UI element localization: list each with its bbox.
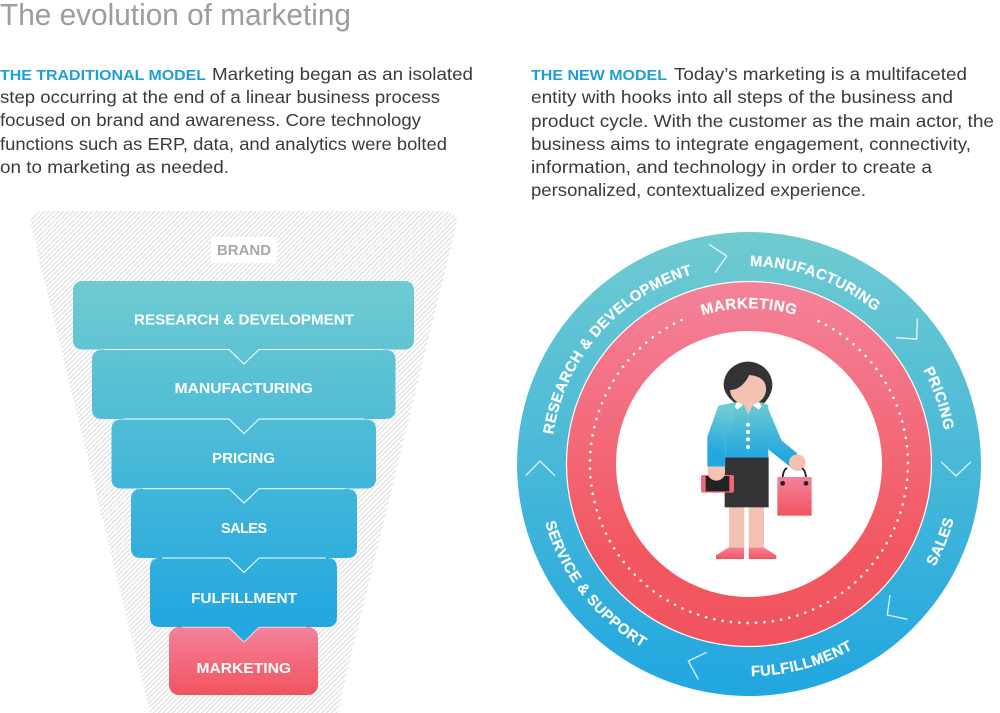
arrow: research to manufacturing xyxy=(709,244,727,273)
arrow: sales to fulfillment xyxy=(887,595,907,619)
text block: the new model: personalized, contextualized experience. xyxy=(531,180,866,200)
text block: the new model xyxy=(531,64,994,200)
bag rivets xyxy=(780,481,808,486)
circular diagram: new model xyxy=(517,232,981,696)
right arm sleeve xyxy=(766,403,797,468)
step: pricing xyxy=(112,420,376,503)
outer ring: business steps xyxy=(517,232,981,696)
text block: the traditional model: Marketing began as an isolated xyxy=(212,64,473,84)
ring label: service and support: SERVICE & SUPPORT xyxy=(546,520,648,646)
ring label: research and development: RESEARCH & DEVELOPMENT xyxy=(543,264,690,434)
text block: the traditional model: on to marketing as needed. xyxy=(0,157,229,177)
skirt xyxy=(725,457,769,507)
heading: the new model: THE NEW MODEL xyxy=(531,68,667,84)
step: research and development: RESEARCH & DEVELOPMENT xyxy=(134,312,354,328)
phone xyxy=(701,475,734,493)
inner ring: marketing xyxy=(566,282,932,646)
ring label: manufacturing: MANUFACTURING xyxy=(750,256,880,310)
neck xyxy=(743,403,753,415)
bag handle xyxy=(783,468,806,483)
left arm sleeve xyxy=(707,402,735,467)
legs xyxy=(729,507,764,548)
text block: the new model: entity with hooks into all steps of the business and xyxy=(531,87,953,107)
center circle xyxy=(616,331,882,597)
hand holding bag xyxy=(789,454,806,471)
step: manufacturing: MANUFACTURING xyxy=(174,381,313,397)
step: marketing xyxy=(169,627,318,695)
funnel diagram: traditional model xyxy=(30,211,457,713)
step: fulfillment xyxy=(150,558,337,642)
heading: the traditional model: THE TRADITIONAL MODEL xyxy=(0,68,206,84)
dotted arc xyxy=(590,319,908,623)
ring label: pricing: PRICING xyxy=(924,366,954,430)
step: sales xyxy=(131,489,357,572)
label: brand xyxy=(211,237,277,263)
arrow: pricing to sales xyxy=(941,462,971,476)
ring label: fulfillment: FULFILLMENT xyxy=(752,640,850,676)
step: fulfillment: FULFILLMENT xyxy=(191,591,297,607)
text block: the new model: information, and technology in order to create a xyxy=(531,157,932,177)
step: pricing: PRICING xyxy=(212,451,275,467)
step: manufacturing xyxy=(92,350,396,434)
face xyxy=(730,375,766,405)
text block: the traditional model: functions such as ERP, data, and analytics were bolted xyxy=(0,134,447,154)
buttons xyxy=(746,423,750,449)
label: brand: BRAND xyxy=(217,243,271,259)
text block: the new model: product cycle. With the customer as the main actor, the xyxy=(531,111,994,131)
text block: the traditional model: step occurring at the end of a linear business process xyxy=(0,87,440,107)
phone screen xyxy=(706,476,729,491)
panel: hatched brand funnel xyxy=(30,211,457,713)
text block: the traditional model: focused on brand and awareness. Core technology xyxy=(0,110,421,130)
hand holding phone xyxy=(708,467,725,481)
shopping bag xyxy=(777,477,812,516)
step: research and development xyxy=(73,281,414,364)
ring label: sales: SALES xyxy=(926,518,953,566)
step: marketing: MARKETING xyxy=(196,661,291,677)
arrow: manufacturing to pricing xyxy=(896,318,917,339)
collar xyxy=(735,401,762,410)
arrow: service to research xyxy=(526,461,555,476)
shirt body xyxy=(725,402,768,457)
text block: the traditional model xyxy=(0,64,473,177)
shoes xyxy=(716,548,776,559)
step: sales: SALES xyxy=(221,521,267,537)
hair xyxy=(724,362,772,403)
ring label: marketing: MARKETING xyxy=(700,298,796,316)
text block: the new model: business aims to integrate engagement, connectivity, xyxy=(531,134,971,154)
text block: the new model: Today’s marketing is a multifaceted xyxy=(674,64,967,84)
arrow: fulfillment to service xyxy=(688,652,707,679)
figure: customer with phone and shopping bag xyxy=(701,362,812,559)
